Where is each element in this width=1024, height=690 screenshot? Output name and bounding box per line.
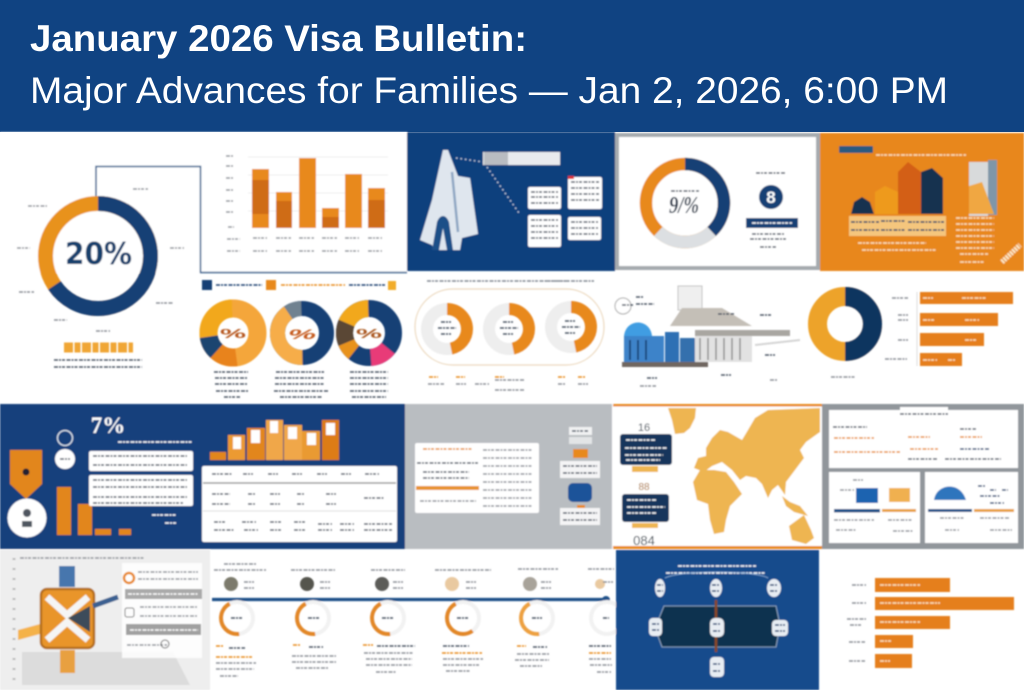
right info card — [122, 563, 202, 658]
stepped orange bars — [210, 420, 339, 460]
panel: bottom horizontal bars — [847, 578, 1014, 668]
step 2 — [291, 570, 336, 668]
panel: three ring gauges — [415, 281, 604, 390]
panel: blue rocket and calendars — [407, 132, 615, 271]
stat: 7%: 7% — [91, 413, 125, 438]
panel: gray document — [405, 404, 612, 549]
panel: half donut and horizontal bars — [818, 292, 1013, 377]
bottom left card — [829, 472, 920, 543]
diagram heading — [666, 566, 766, 573]
panel: capitol building sketch — [615, 286, 800, 386]
callout 2: 084 — [633, 533, 655, 548]
side stat — [746, 173, 798, 247]
gauge 3 — [551, 307, 591, 347]
title line 1: January 2026 Visa Bulletin: — [30, 18, 527, 59]
central dark hub — [655, 606, 780, 647]
side stat: 8 — [766, 188, 776, 207]
panel: navy dashboard — [0, 404, 405, 549]
skyline bars — [851, 160, 997, 216]
panel: orange buildings — [820, 133, 1024, 271]
map landmasses — [668, 408, 820, 544]
donut 2 — [274, 308, 328, 397]
orange pennant — [10, 450, 42, 499]
callout 1 — [620, 422, 672, 472]
title line 2: Major Advances for Families — Jan 2, 2026, 6:00 PM — [30, 70, 948, 111]
donut chart: 20% — [17, 189, 184, 331]
donut chart — [818, 296, 872, 377]
donut 2: % — [288, 326, 317, 342]
callout 2: 88 — [638, 482, 650, 493]
callout 1: 16 — [638, 422, 650, 434]
callout 2 — [622, 482, 669, 548]
panel: gray process diagram — [0, 550, 210, 690]
side chips — [560, 427, 600, 525]
step 4 — [435, 570, 491, 671]
panel: world map — [612, 404, 822, 549]
donut chart — [646, 164, 724, 242]
white badge — [8, 498, 46, 538]
donut chart: 9/% — [669, 193, 699, 219]
donut chart: 20%: 20% — [65, 237, 132, 272]
donut 3: % — [356, 326, 383, 341]
info cards — [89, 451, 193, 506]
panel: gray cards — [822, 404, 1024, 549]
panel: legend and three donuts — [202, 280, 396, 397]
gauge 2 — [489, 309, 529, 349]
header banner — [0, 0, 1024, 132]
gauge 1 — [427, 309, 467, 349]
donut caption — [54, 348, 142, 367]
donut 1 — [208, 308, 258, 397]
panel: timeline — [212, 564, 623, 676]
document text — [416, 449, 533, 506]
bottom right card — [925, 472, 1018, 543]
cream table — [849, 216, 946, 236]
legend — [202, 280, 396, 290]
donut 1: % — [220, 326, 247, 341]
icon: rocket shape — [420, 150, 478, 250]
panel: large donut and bar chart — [0, 132, 407, 367]
bar chart — [226, 156, 388, 251]
white table — [202, 466, 397, 542]
step 6 — [588, 569, 623, 672]
panel: donut 9/% — [615, 133, 820, 270]
panel: blue hub diagram — [616, 550, 819, 690]
step 3 — [363, 570, 415, 672]
donut 3 — [344, 308, 394, 397]
hub nodes — [649, 579, 788, 677]
top card — [829, 407, 1018, 468]
step 5 — [515, 569, 558, 666]
vertical bars — [57, 442, 192, 535]
calendar cards — [483, 152, 602, 247]
step 1 — [214, 564, 266, 676]
horizontal bars — [885, 292, 1013, 366]
small icons — [55, 430, 75, 469]
central diamond icon — [18, 566, 118, 673]
